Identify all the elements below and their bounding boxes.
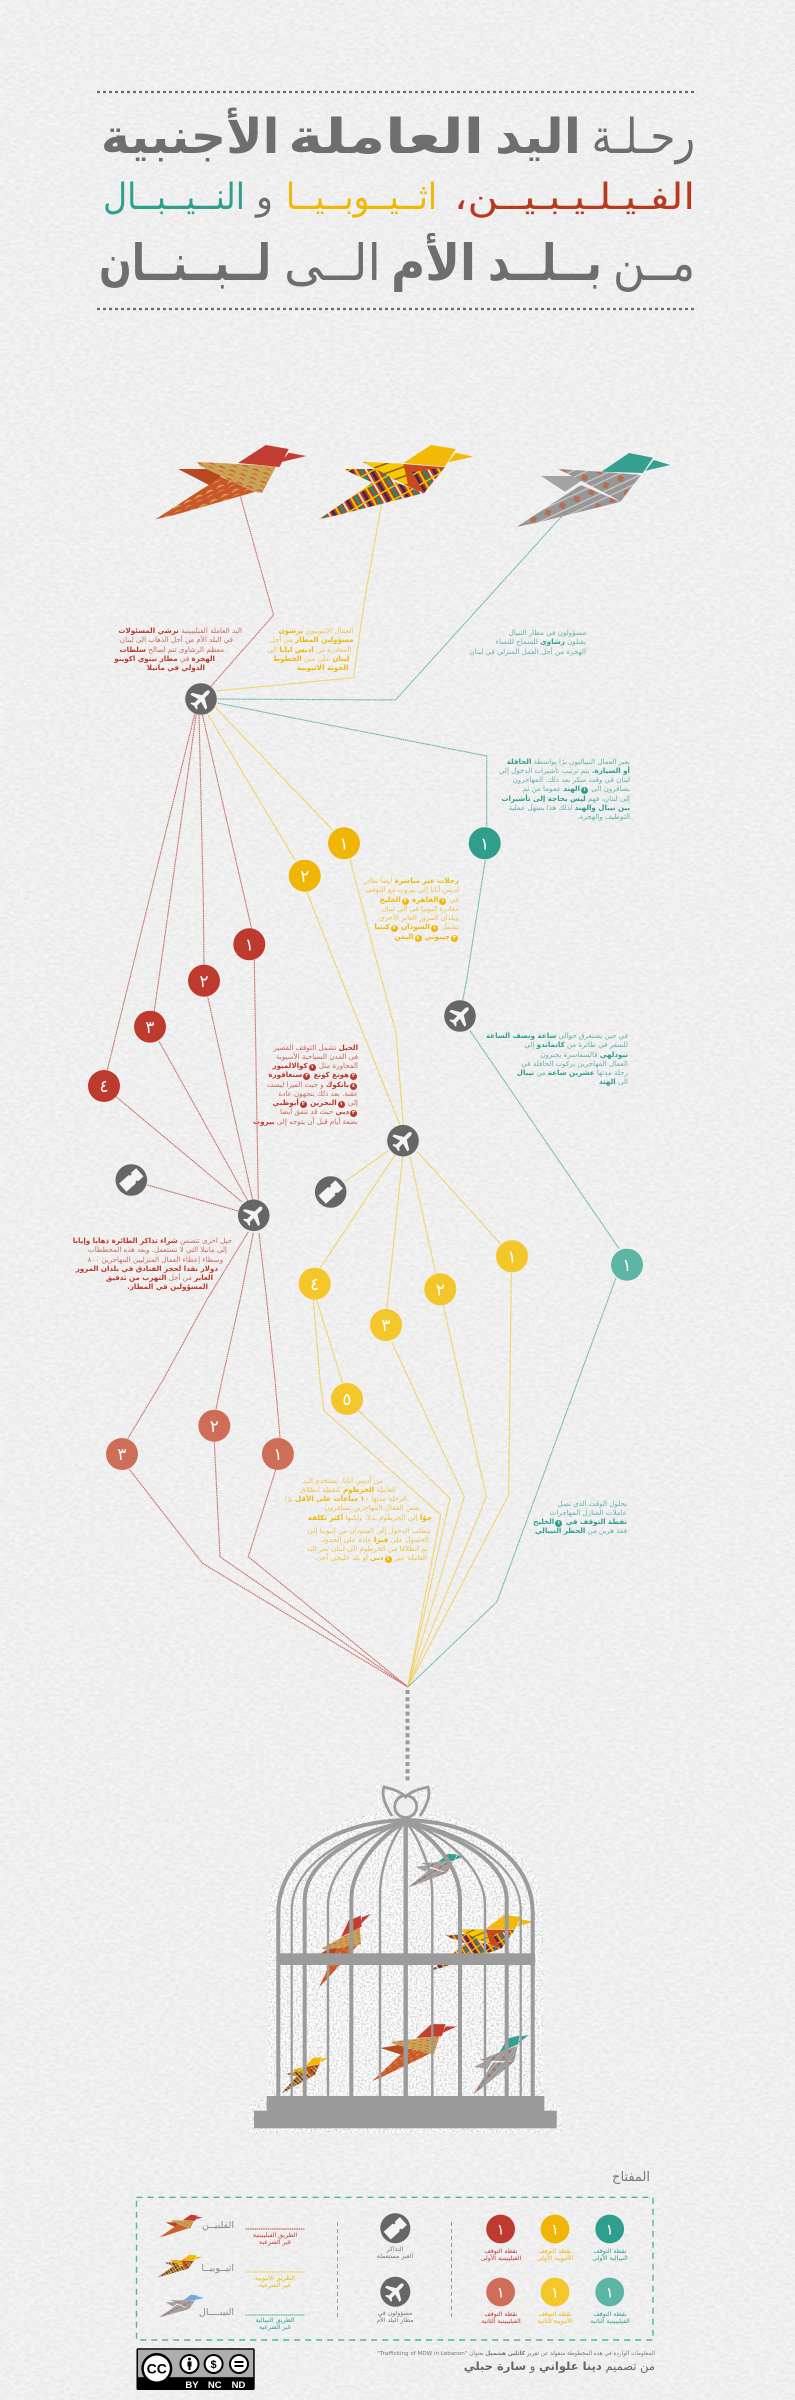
legend label: Philippines second stop: نقطة التوقف <box>484 2311 518 2318</box>
title line 2 countries: اثــيــوبــيــا <box>286 177 437 218</box>
text: Philippines origin bribes <box>114 626 242 672</box>
text: Philippines origin bribes: معظم الرشاوى تتم لصالح سلطات <box>119 644 224 654</box>
route lines: Philippines <box>107 497 408 1687</box>
stop: Philippines second 3 <box>106 1438 138 1470</box>
legend label: Ethiopia route <box>255 2274 295 2289</box>
text: Philippines tricks, Asian stopovers: هونغ كونغ سنغافورة <box>268 1070 349 1079</box>
legend label: Ethiopia first stop <box>537 2248 573 2262</box>
icon: plane, Nepal transit <box>444 1000 476 1032</box>
text: Nepal land route to India: التوظيف والهجرة. <box>577 812 630 821</box>
caged bird: Philippines bottom <box>364 2020 464 2081</box>
legend label: unused tickets: التذاكر <box>387 2246 403 2253</box>
text: Philippines tricks, Asian stopovers: إلى البحرين أبوظبي <box>273 1098 358 1107</box>
legend bird: Ethiopia <box>157 2254 203 2277</box>
cage crossbar <box>277 1953 535 1965</box>
legend bird: Philippines <box>159 2214 203 2237</box>
title line 3 <box>99 232 695 292</box>
legend label: unused tickets <box>377 2246 413 2260</box>
text: Ethiopia origin bribes: الجوية الاثيوبية <box>297 663 348 672</box>
text: Nepal flight Kathmandu to New Delhi: في حين يستغرق حوالي ساعة ونصف الساعة <box>486 1031 628 1040</box>
stop: Ethiopia second 3: ٣ <box>381 1316 391 1336</box>
Creative Commons badge <box>136 2348 255 2391</box>
stop: Philippines 4 <box>88 1070 120 1102</box>
caged bird: Nepal top <box>405 1852 467 1887</box>
text: Ethiopia indirect flights: جيبوتي اليمن <box>394 932 450 940</box>
text: Ethiopia indirect flights: ٢ <box>393 925 396 931</box>
text: Philippines origin bribes: الدولي في مانيلا <box>147 663 205 672</box>
stop: Ethiopia 2 <box>289 860 321 892</box>
stop: Philippines second 2: ٢ <box>210 1417 219 1437</box>
legend route line: Ethiopia <box>246 2271 305 2273</box>
text: Philippines tricks, Asian stopovers: عقبة. بعد ذلك يتجهون عادة <box>278 1089 358 1098</box>
legend marker: Nepal first stop: ١ <box>606 2220 614 2238</box>
stop: Philippines second 1 <box>262 1438 294 1470</box>
stop: Philippines second 1: ١ <box>273 1445 282 1465</box>
stop: Nepal 1: ١ <box>480 834 489 854</box>
text: Ethiopia Sudan visa: يتطلب الدخول إلى السودان من إثيوبيا إلى <box>307 1526 431 1534</box>
title line 1: الأجنبية <box>101 107 279 165</box>
stop: Ethiopia second 4: ٤ <box>310 1275 319 1295</box>
route lines: Ethiopia <box>207 503 511 1687</box>
text: Philippines tricks, Asian stopovers: الحيل تشمل التوقف القصير <box>273 1042 358 1052</box>
icon: plane, Ethiopia hub <box>387 1125 419 1156</box>
text: Philippines tricks, Asian stopovers: المجاورة مثل كوالالمبور <box>272 1061 358 1070</box>
legend label: Nepal route: غير الشرعية <box>259 2324 291 2331</box>
text: Nepal flight Kathmandu to New Delhi: رحلة مدتها عشرين ساعة من نيبال <box>517 1068 628 1077</box>
title line 3: الأم <box>391 232 476 292</box>
text: Ethiopia indirect flights: أديس أبابا إلى بيروت مع التوقف <box>365 885 459 894</box>
text: Ethiopia Sudan visa: ١ <box>386 1556 390 1562</box>
legend label: Nepal first stop: النيبالية الأولى <box>592 2255 628 2262</box>
stop: Ethiopia second 2 <box>424 1273 456 1305</box>
title top dotted rule <box>97 91 696 93</box>
Creative Commons badge: ND <box>232 2380 245 2391</box>
legend marker: Philippines first stop: ١ <box>497 2220 505 2238</box>
text: Philippines tricks, Asian stopovers: ٣ <box>305 1073 308 1079</box>
legend label: Nepal first stop <box>592 2248 628 2262</box>
text: Philippines tricks, Asian stopovers: بانكوك و حيث الفيزا ليست <box>267 1080 349 1088</box>
title block <box>97 92 696 309</box>
text: Ethiopia indirect flights: رحلات غير مباشرة أيضا تغادر <box>364 876 459 885</box>
title line 1: رحـلـة <box>592 109 695 165</box>
text: Nepal land route to India: أو السيارة. يتم ترتيب تأشيرات الدخول إلى <box>499 766 630 775</box>
legend label: Nepal first stop: نقطة التوقف <box>593 2248 627 2255</box>
text: Ethiopia via Khartoum: العاملة الخرطوم كنقطة انطلاق <box>300 1485 396 1494</box>
text: Nepal Gulf stop: نقطة التوقف في الخليج <box>533 1517 627 1526</box>
stop: Ethiopia 1: ١ <box>339 834 349 854</box>
legend label: Philippines first stop: الفيليبينية الأولى <box>481 2255 521 2262</box>
stop: Ethiopia second 5 <box>331 1383 363 1415</box>
legend route line: Nepal <box>246 2314 305 2316</box>
legend marker: Nepal second stop: ١ <box>606 2284 614 2302</box>
text: Ethiopia indirect flights: ٣ <box>453 934 456 940</box>
text: Philippines tricks, Asian stopovers: دبي حيث قد تنفق أيضا <box>280 1107 349 1116</box>
text: Ethiopia via Khartoum: الرحلة مدتها ١٠ ساعات على الأقل برًا <box>285 1494 407 1503</box>
text: Ethiopia indirect flights: ١ <box>441 898 444 904</box>
dotted link to cage <box>406 1690 410 1783</box>
text: Nepal land route to India <box>499 756 630 821</box>
text: Ethiopia origin bribes: لبنان على متن الخطوط <box>273 654 350 663</box>
caged bird: Philippines left <box>297 1909 389 1987</box>
text: Philippines tricks, return tickets: وسطاء إعطاء العمال المنزليين المهاجرين ٨٠٠ <box>88 1254 223 1264</box>
legend icon: plane <box>380 2277 410 2307</box>
source note: المعلومات الواردة في هذه المخطوطة منقولة عن تقرير كاثلين هشميل بعنوان "Trafficking of MDW in Lebanon" <box>377 2351 655 2357</box>
text: Ethiopia indirect flights: ٤ <box>416 934 420 940</box>
icon: plane, origin airport hub <box>185 683 217 715</box>
text: Philippines tricks, Asian stopovers: ٣ <box>352 1110 355 1116</box>
text: Philippines tricks, Asian stopovers <box>253 1042 358 1126</box>
text: Philippines tricks, return tickets: حيل اخرى تتضمن شراء تذاكر الطائرة ذهابا وإيابا <box>73 1236 232 1245</box>
stop: Ethiopia 2: ٢ <box>300 867 309 887</box>
text: Ethiopia via Khartoum <box>285 1476 432 1522</box>
title line 1: العاملة <box>288 109 484 165</box>
text: Ethiopia origin bribes <box>267 626 354 672</box>
text: Philippines origin bribes: اليد العاملة الفيليبينية ترشي المسئولات <box>118 626 242 635</box>
text: Philippines tricks, Asian stopovers: ١ <box>340 1101 343 1107</box>
text: Philippines origin bribes: في البلد الأم من أجل الذهاب الى لبنان <box>120 635 233 644</box>
stop: Nepal second 1: ١ <box>622 1256 632 1276</box>
legend label: Philippines first stop: نقطة التوقف <box>484 2248 518 2255</box>
legend label: home airport officials: مطار البلد الأم <box>376 2317 414 2324</box>
title bottom dotted rule <box>97 308 696 310</box>
legend label: Philippines: الفلبيــن <box>202 2220 234 2231</box>
stop: Ethiopia second 5: ٥ <box>342 1390 352 1410</box>
Creative Commons badge: NC <box>208 2380 222 2391</box>
legend box <box>136 2197 653 2340</box>
text: Philippines tricks, Asian stopovers: في المدن السياحية الآسيوية <box>276 1052 358 1061</box>
legend label: unused tickets: الغير مستعملة <box>377 2253 413 2260</box>
text: Philippines tricks, return tickets: إلى مانيلا التي لا تستعمل. وبعد هذه المخططات <box>88 1245 227 1254</box>
text: Nepal land route to India: يعبر العمال النيباليون برًا بواسطة الحافلة <box>507 756 630 766</box>
legend label: Philippines second stop: الفيليبينية الثانية <box>481 2318 521 2325</box>
legend label: Ethiopia second stop <box>537 2311 573 2325</box>
text: Philippines tricks, return tickets <box>73 1236 232 1291</box>
stop: Philippines second 2 <box>198 1410 230 1442</box>
cage lower base <box>254 2111 557 2128</box>
legend label: Nepal route <box>255 2317 295 2331</box>
icon: ticket, Philippines <box>116 1164 147 1196</box>
stop: Ethiopia second 1 <box>496 1240 528 1272</box>
text: Ethiopia indirect flights: تشمل السودان كينيا <box>374 922 459 931</box>
legend label: Philippines first stop <box>481 2248 521 2262</box>
stop: Nepal second 1 <box>611 1249 643 1281</box>
title line 3: الــى <box>284 234 381 292</box>
text: Ethiopia via Khartoum: بعض العمال المهاجرين يسافرون <box>324 1503 420 1512</box>
caged bird: Ethiopia right <box>427 1914 536 1971</box>
text: Ethiopia indirect flights: ٢ <box>404 898 407 904</box>
stop: Philippines 1: ١ <box>245 936 254 956</box>
legend label: Nepal second stop <box>590 2311 630 2325</box>
stop: Ethiopia second 2: ٢ <box>436 1280 445 1300</box>
title line 2 countries: النــيــبــال <box>103 177 245 218</box>
icon: plane, Philippines hub <box>238 1199 270 1231</box>
legend label: Ethiopia route: غير الشرعية <box>259 2282 291 2289</box>
text: Ethiopia indirect flights: ١ <box>433 925 436 931</box>
legend label: Ethiopia second stop: الأثيوبية الثانية <box>537 2318 573 2325</box>
text: Nepal flight Kathmandu to New Delhi: العمال المهاجرين بركوب الحافلة في <box>521 1059 628 1068</box>
caged bird: Nepal bottom <box>458 2030 541 2094</box>
title line 3: بــلــد <box>488 234 602 292</box>
legend marker: Philippines second stop: ١ <box>497 2284 505 2302</box>
legend label: Nepal route: الطريق النيبالية <box>255 2317 295 2324</box>
text: Philippines tricks, Asian stopovers: ٢ <box>352 1073 355 1079</box>
origami bird: Philippines <box>156 445 306 519</box>
text: Nepal Gulf stop: بحلول الوقت الذي تصل <box>557 1498 627 1508</box>
text: Nepal flight Kathmandu to New Delhi: للسفر في طائرة من كاتماندو إلى <box>524 1040 628 1049</box>
design credit: من تصميم دينا علواني و سارة حبلي <box>464 2359 655 2373</box>
text: Ethiopia Sudan visa: العاملة عبر دبي أو بلد خليجي آخر. <box>316 1553 427 1562</box>
stop: Philippines 3: ٣ <box>145 1018 155 1038</box>
text: Ethiopia origin bribes: مسؤولين المطار من أجل <box>270 635 354 644</box>
text: Philippines tricks, return tickets: المسؤولين في المطار. <box>127 1282 208 1291</box>
icon: ticket, Ethiopia <box>315 1176 347 1208</box>
title line 3: لــبــنــان <box>99 234 271 292</box>
text: Ethiopia Sudan visa: ثم انطلاقا من الخرطوم الى لبنان تمر اليد <box>307 1544 428 1553</box>
text: Philippines tricks, return tickets: دولار نقدا لحجز الفنادق في بلدان المرور <box>76 1264 218 1273</box>
legend route line: Philippines <box>246 2228 305 2230</box>
legend label: Ethiopia first stop: نقطة التوقف <box>538 2248 572 2255</box>
text: Nepal land route to India: ١ <box>583 787 586 793</box>
text: Philippines tricks, Asian stopovers: ٢ <box>302 1101 305 1107</box>
Creative Commons badge: BY <box>185 2380 199 2391</box>
Creative Commons badge: CC <box>147 2360 167 2376</box>
text: Philippines tricks, return tickets: العابر من أجل التهرب من تدقيق <box>106 1273 213 1282</box>
cage bars <box>278 1787 533 2097</box>
title line 2 countries: الفـيـلـيـبـيــن، <box>454 177 695 218</box>
legend label: Nepal: النيبــــال <box>199 2307 234 2318</box>
stop: Ethiopia second 3 <box>370 1309 402 1341</box>
text: Nepal Gulf stop: عاملات المنازل المهاجرات <box>550 1508 627 1517</box>
legend label: Nepal second stop: نقطة التوقف <box>593 2311 627 2318</box>
text: Nepal Gulf stop: فقد هربن من الحظر النيبالي <box>535 1526 627 1535</box>
stop: Philippines 3 <box>134 1011 166 1043</box>
text: Nepal origin bribes: يقبلون رشاوى للسماح للنساء <box>496 637 586 646</box>
legend label: Philippines route: غير الشرعية <box>259 2239 291 2246</box>
cage upper base <box>267 2096 544 2111</box>
stop: Nepal 1 <box>469 827 501 859</box>
legend bird: Nepal, blue head <box>159 2294 204 2317</box>
text: Nepal land route to India: بين نيبال والهند لذلك هذا يسهل عملية <box>509 803 630 812</box>
cage speckled interior <box>240 1775 570 2140</box>
route lines: Nepal <box>218 515 619 1687</box>
text: Nepal origin bribes <box>469 628 586 656</box>
text: Nepal origin bribes: الهجرة من أجل العمل المنزلي في لبنان <box>469 646 586 656</box>
text: Philippines tricks, Asian stopovers: ٤ <box>352 1082 355 1088</box>
text: Nepal land route to India: إلى لبنان، فهم ليس بحاجة إلى تأشيرات <box>501 794 630 802</box>
text: Ethiopia Sudan visa: الحصول على فيزا عادة على الحدود. <box>320 1535 429 1544</box>
title line 1 <box>101 107 695 165</box>
title line 2 countries: و <box>254 177 273 218</box>
text: Ethiopia indirect flights: مغادرة إثيوبيا في الى لبنان <box>381 904 459 913</box>
title line 1: اليد <box>495 109 581 165</box>
legend dashed frame <box>136 2197 653 2340</box>
stop: Philippines 2 <box>188 965 220 997</box>
origami bird: Nepal <box>517 453 670 527</box>
text: Nepal flight Kathmandu to New Delhi: نيودلهي فالسماسرة يجبرون <box>540 1050 628 1058</box>
text: Ethiopia indirect flights: في القاهرة الخليج <box>380 894 459 904</box>
legend label: Nepal second stop: الفيليبينية الثانية <box>590 2318 630 2325</box>
stop: Ethiopia 1 <box>328 827 360 859</box>
text: Nepal Gulf stop: ١ <box>557 1520 560 1526</box>
legend column dividers <box>338 2222 452 2318</box>
title line 2 countries <box>103 177 695 218</box>
legend label: home airport officials <box>376 2310 414 2324</box>
text: Nepal flight Kathmandu to New Delhi: الى الهند <box>599 1077 628 1086</box>
origami bird: Ethiopia <box>319 445 473 519</box>
stop: Philippines second 3: ٣ <box>117 1445 127 1465</box>
text: Philippines origin bribes: الهجرة في مطار نينوي اكوينو <box>114 654 215 663</box>
legend marker: Ethiopia second stop: ١ <box>551 2284 559 2302</box>
legend label: Philippines route: الطريق الفيليبينية <box>253 2232 297 2239</box>
text: Nepal origin bribes: مسؤولون في مطار النيبال <box>509 628 586 637</box>
legend label: Ethiopia second stop: نقطة التوقف <box>538 2311 572 2318</box>
stop: Philippines 2: ٢ <box>199 972 209 992</box>
text: Ethiopia via Khartoum: من أديس أبابا، تستخدم اليد <box>303 1476 383 1484</box>
stop: Philippines 1 <box>233 928 265 960</box>
text: Ethiopia origin bribes: العمال الاثيوبيون يرشون <box>279 626 354 635</box>
legend label: Ethiopia: اثيــوبيــا <box>201 2263 234 2274</box>
text: Nepal land route to India: يسافرون الى الهند عموما من ثم <box>523 784 630 793</box>
legend marker: Ethiopia first stop: ١ <box>551 2220 559 2238</box>
legend icon: ticket <box>380 2213 410 2243</box>
Creative Commons badge: $ <box>211 2359 217 2371</box>
legend label: home airport officials: مسؤولون في <box>378 2310 412 2317</box>
text: Ethiopia origin bribes: المغادرة من اديس ابابا الى <box>267 644 352 654</box>
caged bird: Ethiopia bottom <box>275 2054 334 2093</box>
text: Nepal land route to India: لبنان في وقت مبكر بعد ذلك، المهاجرون <box>512 775 630 784</box>
text: Philippines tricks, Asian stopovers: بضعة أيام قبل أن يتوجه إلى بيروت <box>253 1116 358 1126</box>
legend label: Philippines second stop <box>481 2311 521 2325</box>
text: Philippines tricks, Asian stopovers: ١ <box>311 1064 314 1070</box>
text: Ethiopia Sudan visa <box>307 1526 431 1563</box>
text: Nepal Gulf stop <box>533 1498 627 1535</box>
text: Nepal flight Kathmandu to New Delhi <box>486 1031 628 1086</box>
legend label: Philippines route <box>253 2232 297 2246</box>
title line 3: مــن <box>613 234 695 292</box>
legend heading: المفتاح <box>612 2170 650 2185</box>
text: Ethiopia indirect flights: وبلدان المرور العابر الأخرى <box>379 913 459 922</box>
legend label: Ethiopia first stop: الأثيوبية الأولى <box>537 2255 573 2262</box>
stop: Ethiopia second 1: ١ <box>507 1248 517 1268</box>
stop: Ethiopia second 4 <box>299 1268 331 1300</box>
stop: Philippines 4: ٤ <box>99 1077 109 1097</box>
legend label: Ethiopia route: الطريق الأثيوبية <box>255 2275 295 2282</box>
text: Ethiopia indirect flights <box>363 876 459 942</box>
birdcage <box>240 1775 570 2140</box>
text: Ethiopia via Khartoum: جوًا إلى الخرطوم بدلا، ولكنها أكثر تكلفة <box>308 1512 432 1522</box>
